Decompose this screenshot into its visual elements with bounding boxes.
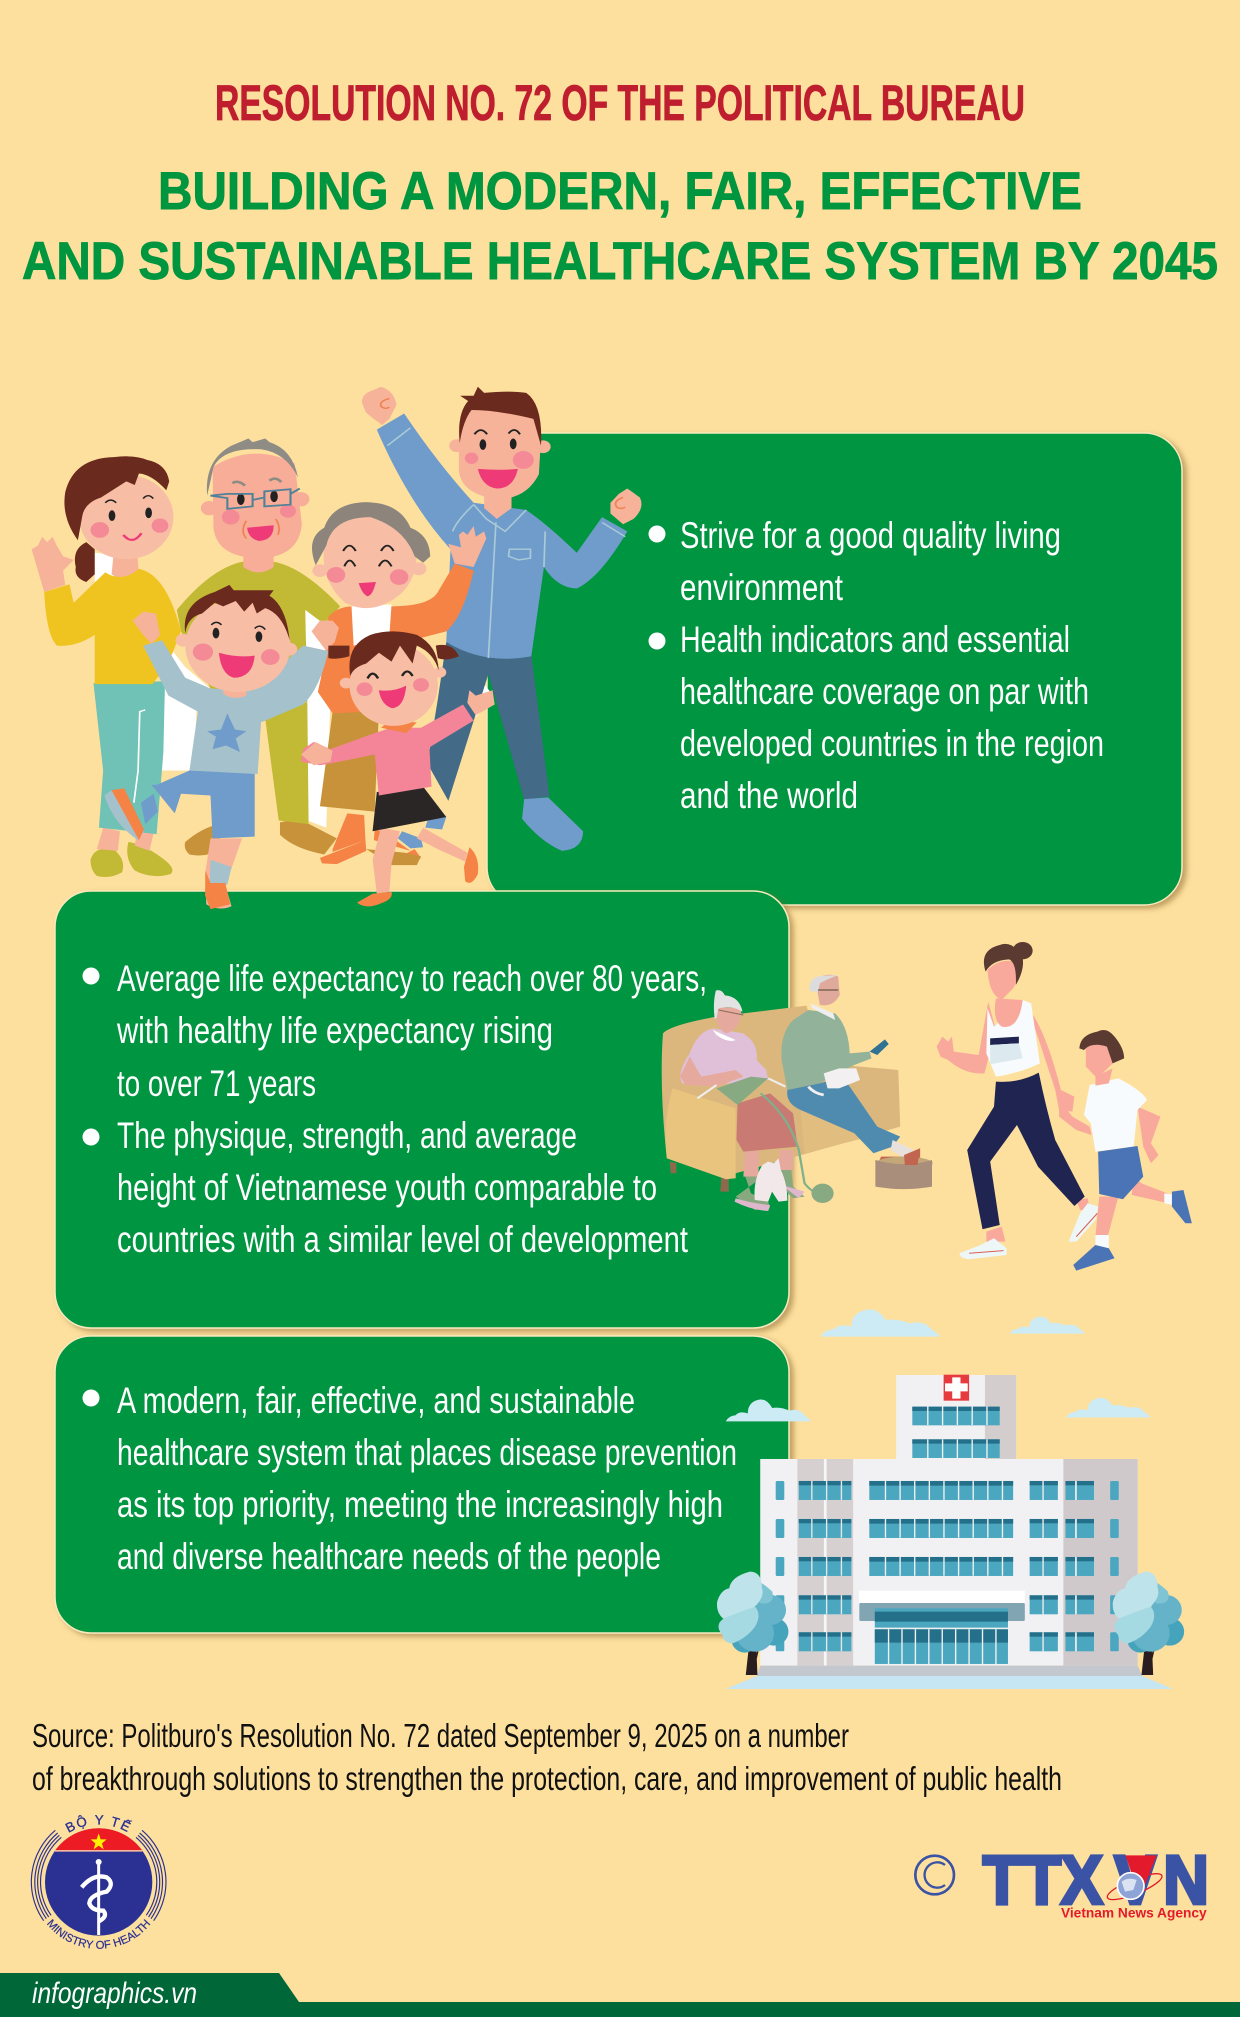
jogging boy xyxy=(1059,1030,1192,1271)
ground xyxy=(726,1666,1173,1689)
source note: Source: Politburo's Resolution No. 72 dated September 9, 2025 on a number xyxy=(32,1717,849,1754)
heading: main title xyxy=(22,162,1218,291)
panel: healthcare system: A modern, fair, effective, and sustainable xyxy=(117,1380,635,1421)
sofa xyxy=(662,1006,900,1192)
illustration: hospital building xyxy=(717,1309,1184,1689)
dad xyxy=(362,387,641,851)
panel: good living environment: healthcare coverage on par with xyxy=(680,671,1089,712)
panel: good living environment: environment xyxy=(680,567,844,608)
panel: life expectancy: height of Vietnamese youth comparable to xyxy=(117,1167,657,1208)
label: BO Y TE: BỘ Y TẾ xyxy=(65,1815,132,1833)
illustration: happy family xyxy=(32,387,641,909)
boy xyxy=(104,585,339,909)
entrance xyxy=(859,1591,1025,1664)
trees xyxy=(717,1572,1184,1675)
copyright mark xyxy=(915,1856,954,1894)
panel: healthcare system: healthcare system that places disease prevention xyxy=(117,1432,737,1473)
raised fist xyxy=(362,387,397,425)
logo: TTXVN Vietnam News Agency xyxy=(915,1842,1209,1921)
main block xyxy=(760,1459,1138,1666)
label: ministry of health: MINISTRY OF HEALTH xyxy=(46,1919,150,1949)
tower xyxy=(896,1375,1016,1459)
laurel arcs xyxy=(31,1830,166,1921)
panel: life expectancy xyxy=(55,891,789,1328)
panel: life expectancy: Average life expectancy to reach over 80 years, xyxy=(117,958,707,999)
panel: life expectancy: countries with a similar level of development xyxy=(117,1219,689,1260)
rod and serpent xyxy=(82,1859,111,1935)
panel: good living environment: Strive for a good quality living xyxy=(680,515,1061,556)
grandpa xyxy=(177,439,340,855)
panel: good living environment: and the world xyxy=(680,775,858,816)
mom xyxy=(32,456,181,877)
logo: TTXVN Vietnam News Agency: Vietnam News Agency xyxy=(1061,1906,1207,1921)
panel: healthcare system: and diverse healthcare needs of the people xyxy=(117,1536,661,1577)
panel: good living environment: Health indicators and essential xyxy=(680,619,1070,660)
footer band xyxy=(0,1973,1240,2017)
panel: life expectancy: to over 71 years xyxy=(117,1063,316,1104)
heading: main title: BUILDING A MODERN, FAIR, EFFECTIVE xyxy=(158,162,1082,221)
source note xyxy=(32,1717,1062,1797)
girl xyxy=(301,631,495,906)
grandma on sofa xyxy=(680,990,834,1211)
grandpa on sofa xyxy=(781,975,933,1189)
right fist xyxy=(610,489,641,524)
panel: good living environment xyxy=(487,433,1182,905)
illustration: elderly couple and joggers xyxy=(662,942,1192,1271)
footer band: infographics.vn xyxy=(32,1977,197,2010)
cat xyxy=(754,1158,787,1202)
panel: life expectancy: with healthy life expectancy rising xyxy=(116,1010,553,1051)
panel: healthcare system xyxy=(55,1336,789,1633)
panel: healthcare system: as its top priority, meeting the increasingly high xyxy=(117,1484,723,1525)
panel: life expectancy: The physique, strength, and average xyxy=(117,1115,577,1156)
jogging woman xyxy=(937,942,1098,1259)
grandma xyxy=(312,502,486,865)
TTXVN letters: TTXVN xyxy=(983,1842,1209,1918)
logo: Ministry of Health xyxy=(30,1815,167,1949)
clouds xyxy=(726,1309,1151,1421)
panel: good living environment: developed countries in the region xyxy=(680,723,1104,764)
